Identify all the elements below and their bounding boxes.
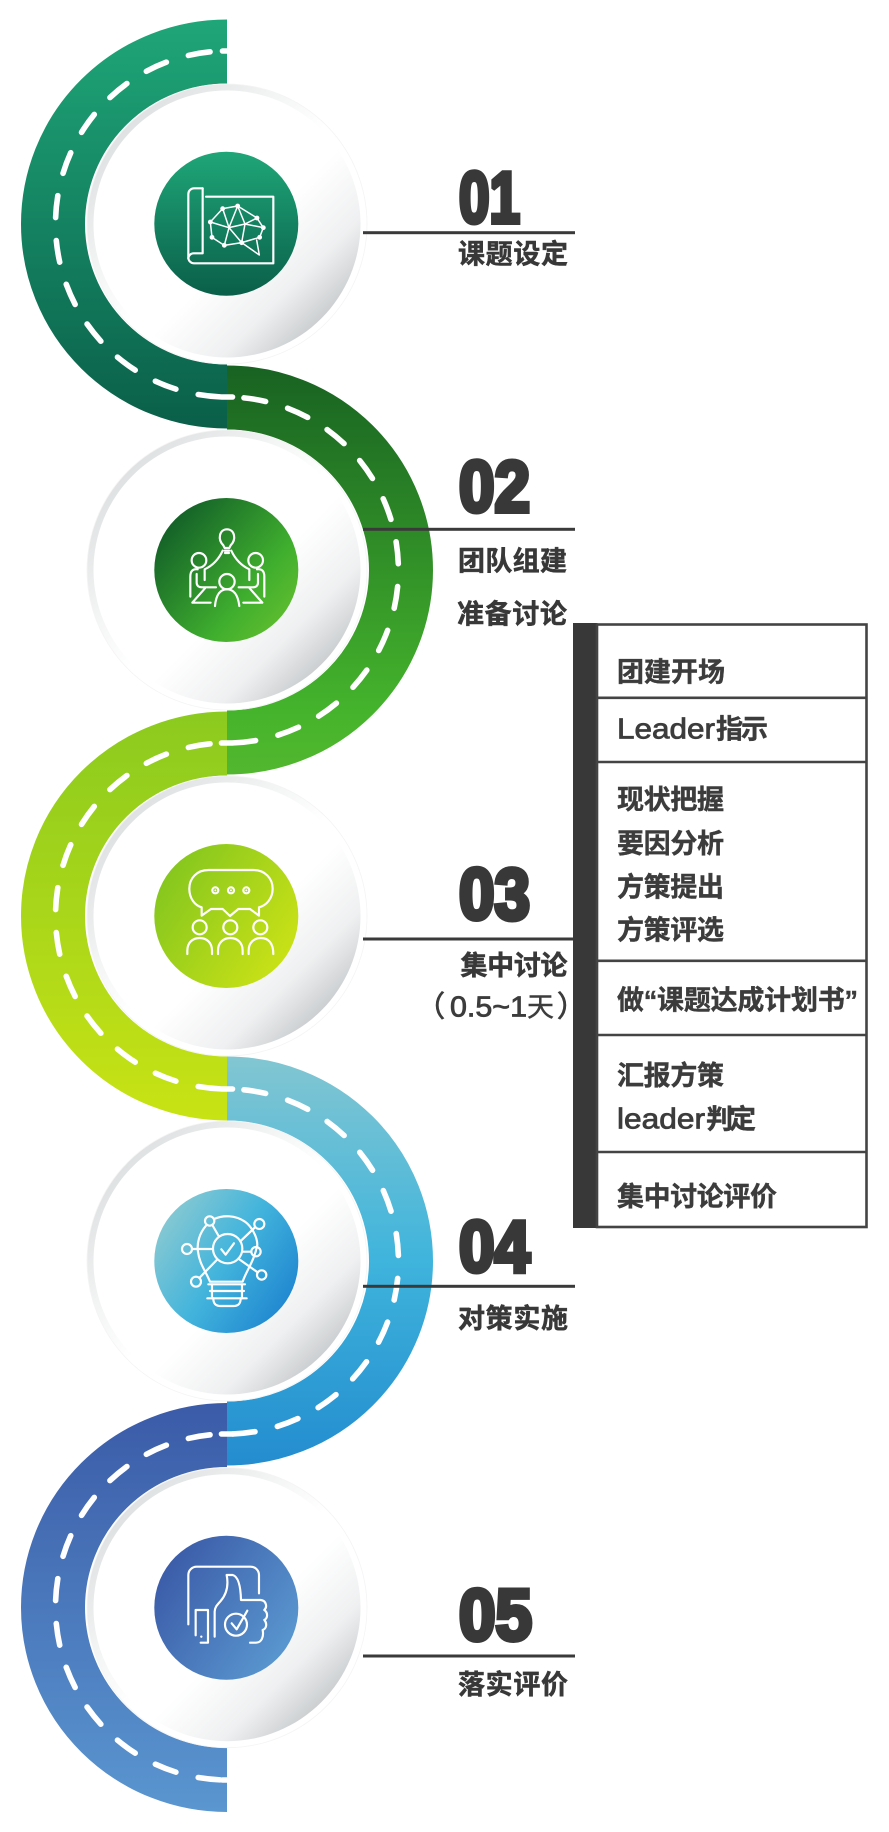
row: analysis steps: 方策评选 [617,914,724,946]
number 05: 05 [459,1576,532,1656]
icon: team around table with bulb [190,529,264,606]
row: analysis steps: 方策提出 [617,872,724,902]
row: analysis steps: 现状把握 [617,785,724,815]
row: report and judge [617,1060,756,1136]
label: step 5: 落实评价 [458,1670,568,1700]
step 3 disc [87,776,367,1056]
row: report and judge: leader [617,1104,705,1136]
step 5 disc [87,1468,367,1748]
label: step 3 duration: 0.5~1 [450,992,527,1024]
road segment 4 [227,1088,401,1434]
leader line 1 [363,231,575,234]
road joins [222,397,232,1434]
row: leader instructions: 指示 [716,714,768,744]
label: step 2 line 1: 团队组建 [458,546,567,576]
icon: light bulb network with check [182,1216,266,1306]
panel bar [573,623,598,1228]
road segment 3 [53,743,227,1089]
road segment 1 [53,51,227,397]
icon: group discussion speech bubble [187,870,273,954]
label: step 3 duration: 天 [527,992,554,1022]
row: analysis steps: 要因分析 [617,829,724,859]
step 1 disc [87,84,367,364]
panel frame and row dividers [597,624,866,1227]
road segment 2 [227,397,401,743]
leader line 5 [363,1654,575,1658]
label: step 3 line 1: 集中讨论 [460,951,568,981]
row: achievement plan: 做“课题达成计划书” [617,986,858,1016]
label: step 4: 对策实施 [458,1304,568,1334]
step 2 disc [87,430,367,710]
leader line 3 [363,938,575,940]
row: leader instructions: Leader [617,714,715,746]
label: step 3 duration [416,992,586,1024]
row: report and judge: 汇报方策 [617,1060,724,1091]
number 02: 02 [459,448,530,528]
panel: concentrated discussion agenda [573,623,866,1228]
number 04: 04 [459,1208,530,1288]
row: team opening: 团建开场 [617,658,725,688]
number 01: 01 [459,158,520,238]
row: report and judge: 判定 [706,1104,756,1134]
label: step 3 duration: ） [557,992,586,1024]
label: step 1: 课题设定 [458,240,568,270]
row: evaluation: 集中讨论评价 [617,1182,777,1212]
icon: thumbs up with check [188,1567,267,1643]
step 4 disc [87,1121,367,1401]
icon: map with brain network [188,188,273,263]
road segment 5 [53,1434,227,1780]
leader line 4 [363,1285,575,1288]
row: leader instructions [617,714,768,746]
leader line 2 [363,528,575,531]
label: step 3 duration: （ [416,992,445,1024]
number 03: 03 [459,855,530,935]
row: analysis steps [617,785,724,946]
label: step 2 line 2: 准备讨论 [457,600,567,630]
